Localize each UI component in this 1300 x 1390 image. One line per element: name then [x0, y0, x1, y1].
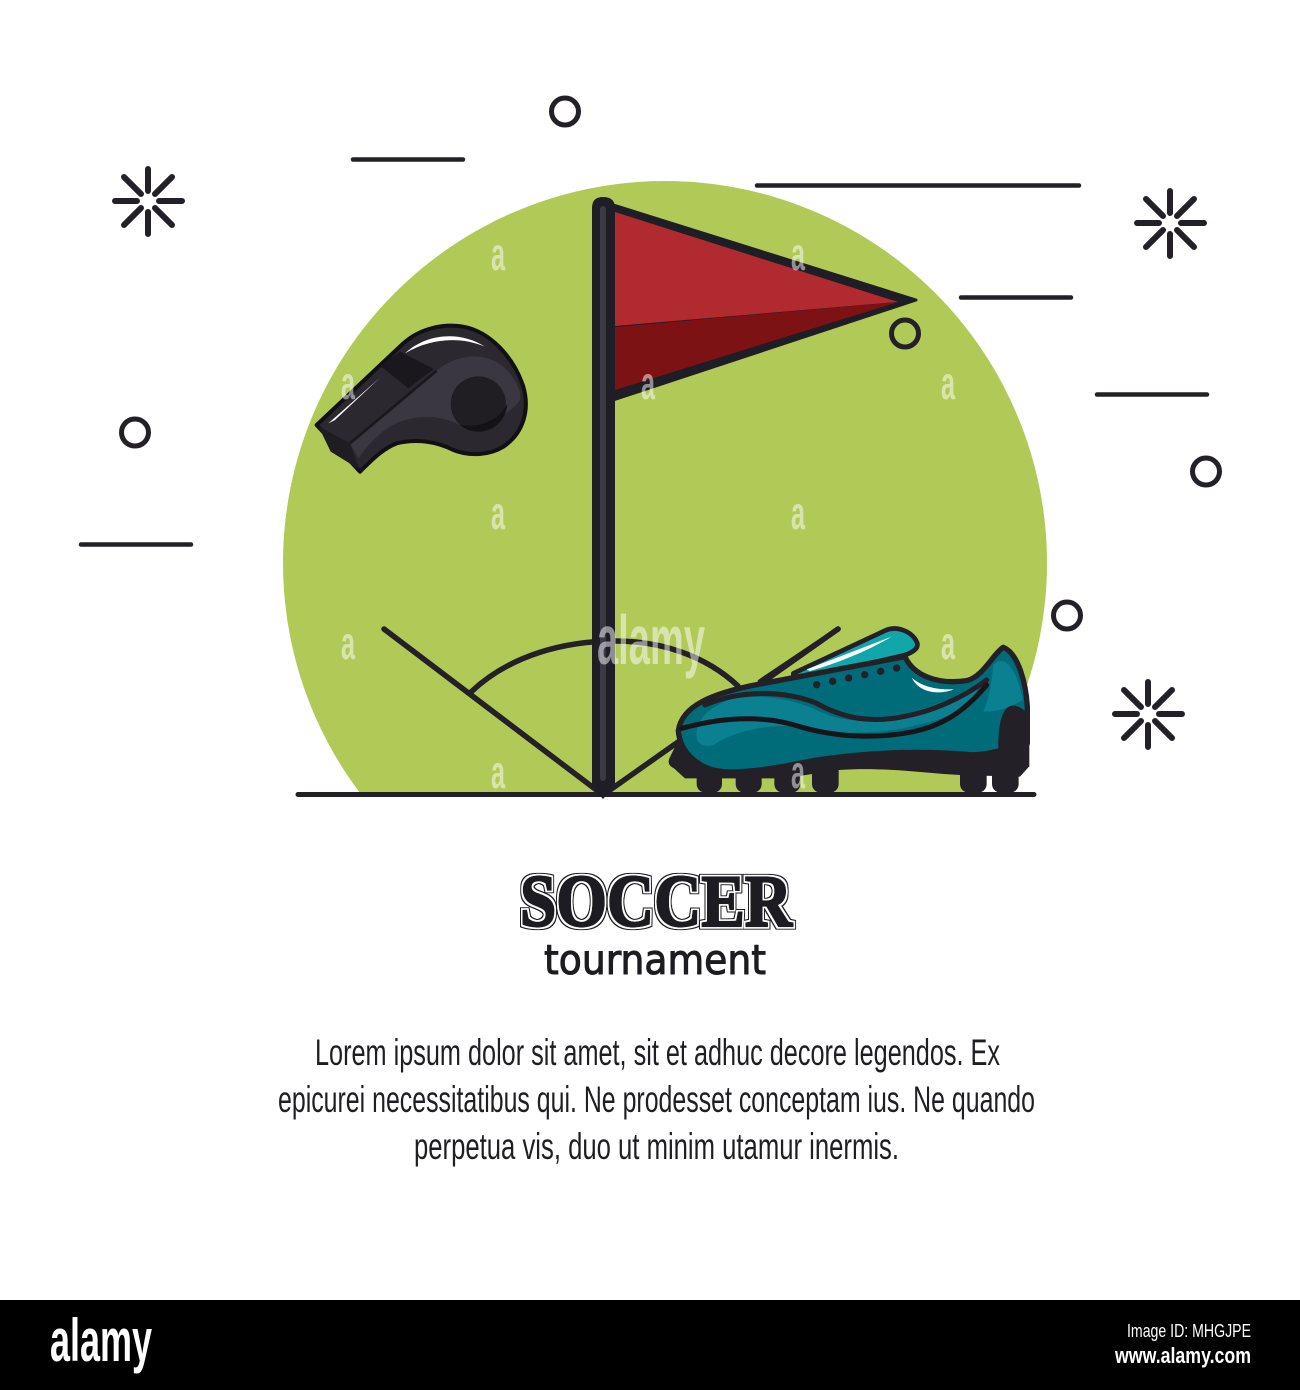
image id: Image ID: MHGJPE [1127, 1321, 1251, 1341]
shoe upper [678, 647, 1027, 772]
watermarks: a [941, 617, 955, 669]
watermarks: a [491, 487, 505, 539]
decorative lines [81, 160, 1207, 544]
watermarks: a [491, 228, 505, 280]
body text: perpetua vis, duo ut minim utamur inermis. [414, 1126, 899, 1167]
website: www.alamy.com [1114, 1343, 1251, 1368]
watermarks: a [491, 746, 505, 798]
watermarks: a [341, 357, 355, 409]
soccer shoe [669, 629, 1029, 793]
watermarks: a [341, 617, 355, 669]
heel counter [997, 706, 1029, 773]
footer logo: alamy [50, 1307, 152, 1374]
watermarks [341, 228, 955, 798]
title: SOCCER: SOCCER [520, 861, 793, 943]
watermarks: alamy [597, 601, 705, 679]
sparkle left [115, 169, 182, 234]
green circle [283, 181, 1047, 792]
sparkle right bottom [1115, 682, 1182, 747]
body text [278, 1032, 1035, 1167]
whistle [317, 326, 526, 472]
body text: Lorem ipsum dolor sit amet, sit et adhuc decore legendos. Ex [315, 1032, 1000, 1073]
watermarks: a [941, 357, 955, 409]
flag [592, 197, 916, 799]
ground line [298, 792, 1034, 797]
watermarks: a [791, 746, 805, 798]
pennant [607, 203, 916, 402]
sole and studs [669, 740, 1029, 793]
watermarks: a [791, 487, 805, 539]
watermarks: a [641, 357, 655, 409]
laces and tongue [793, 629, 917, 682]
sparkle right top [1137, 191, 1204, 256]
footer bar [0, 1300, 1300, 1390]
shoe highlight [912, 678, 954, 692]
lighter shoe panels [696, 685, 980, 746]
eyelets [813, 664, 900, 688]
watermarks: a [791, 228, 805, 280]
flag pole [592, 197, 615, 799]
corner field markings [384, 629, 838, 795]
seam lines [705, 680, 987, 720]
decorative rings [122, 98, 1220, 629]
subtitle: tournament: tournament [544, 936, 766, 984]
